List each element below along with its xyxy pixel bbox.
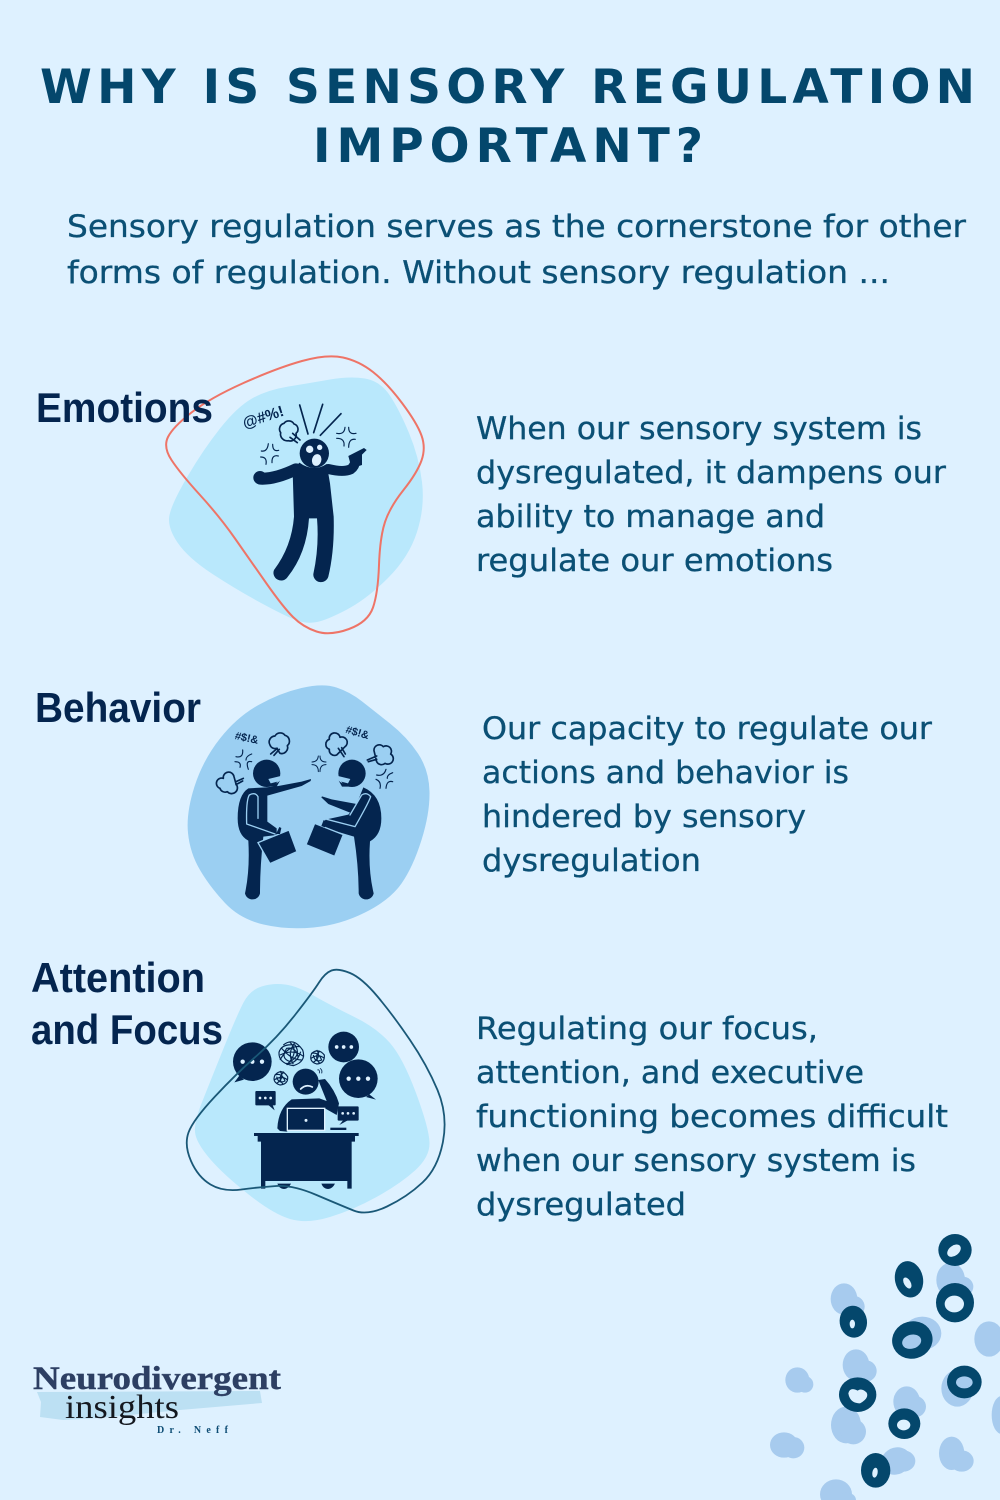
text block: behavior: [482, 711, 932, 879]
heading: behavior: Behavior: [35, 684, 201, 731]
intro text: [67, 209, 966, 291]
light blobs: [770, 1263, 1000, 1500]
background blob: emotions: [169, 377, 423, 623]
heading: attention and focus: and Focus: [31, 1006, 223, 1053]
text block: behavior: dysregulation: [482, 843, 701, 879]
heading: emotions: Emotions: [36, 384, 213, 431]
text block: attention: attention, and executive: [476, 1055, 864, 1091]
desk: [254, 1133, 359, 1189]
brush stroke: [37, 1391, 262, 1420]
intro text: forms of regulation. Without sensory regulation ...: [67, 255, 890, 291]
text block: attention: when our sensory system is: [476, 1143, 916, 1179]
panel: emotions illustration: [166, 356, 424, 633]
speech bubbles: [233, 1032, 378, 1125]
title: IMPORTANT?: [313, 119, 703, 174]
panel: attention illustration: [187, 970, 445, 1221]
panel: behavior illustration: [188, 685, 430, 928]
text block: emotions: [476, 411, 946, 579]
heading: attention and focus: Attention: [31, 954, 205, 1001]
title: [40, 60, 975, 174]
heading: attention and focus: [31, 954, 223, 1053]
outline: navy blob: [187, 970, 445, 1213]
text block: emotions: When our sensory system is: [476, 411, 922, 447]
text block: attention: dysregulated: [476, 1187, 686, 1223]
text block: attention: [476, 1011, 948, 1223]
background blob: attention: [195, 984, 430, 1221]
scribbles: [274, 1042, 324, 1085]
left person: [238, 760, 311, 899]
icon: angry person: [241, 403, 367, 582]
logo: Neurodivergent: [33, 1361, 281, 1397]
decoration: scattered rings: [770, 1234, 1000, 1500]
text block: behavior: Our capacity to regulate our: [482, 711, 932, 747]
text block: emotions: dysregulated, it dampens our: [476, 455, 946, 491]
logo: insights: [65, 1389, 179, 1426]
background blob: behavior: [188, 685, 430, 928]
icon: two arguing people: [216, 724, 393, 899]
icon: angry person: @#%!: [241, 403, 286, 432]
text block: behavior: hindered by sensory: [482, 799, 806, 835]
text block: attention: Regulating our focus,: [476, 1011, 818, 1047]
icon: overwhelmed person at desk: [233, 1032, 378, 1189]
laptop: [287, 1108, 325, 1130]
intro text: Sensory regulation serves as the cornerstone for other: [67, 209, 966, 245]
icon: two arguing people: #$!&: [344, 724, 370, 742]
symbols and puffs: #$!&: [234, 730, 260, 747]
dark rings: [838, 1234, 982, 1488]
text block: attention: functioning becomes difficult: [476, 1099, 948, 1135]
text block: behavior: actions and behavior is: [482, 755, 849, 791]
text block: emotions: regulate our emotions: [476, 543, 833, 579]
person: [293, 1069, 319, 1095]
right person: [306, 760, 381, 899]
title: WHY IS SENSORY REGULATION: [40, 60, 975, 115]
outline: coral blob: [166, 356, 424, 633]
text block: emotions: ability to manage and: [476, 499, 825, 535]
logo: Dr. Neff: [157, 1425, 229, 1436]
logo: [33, 1361, 281, 1436]
